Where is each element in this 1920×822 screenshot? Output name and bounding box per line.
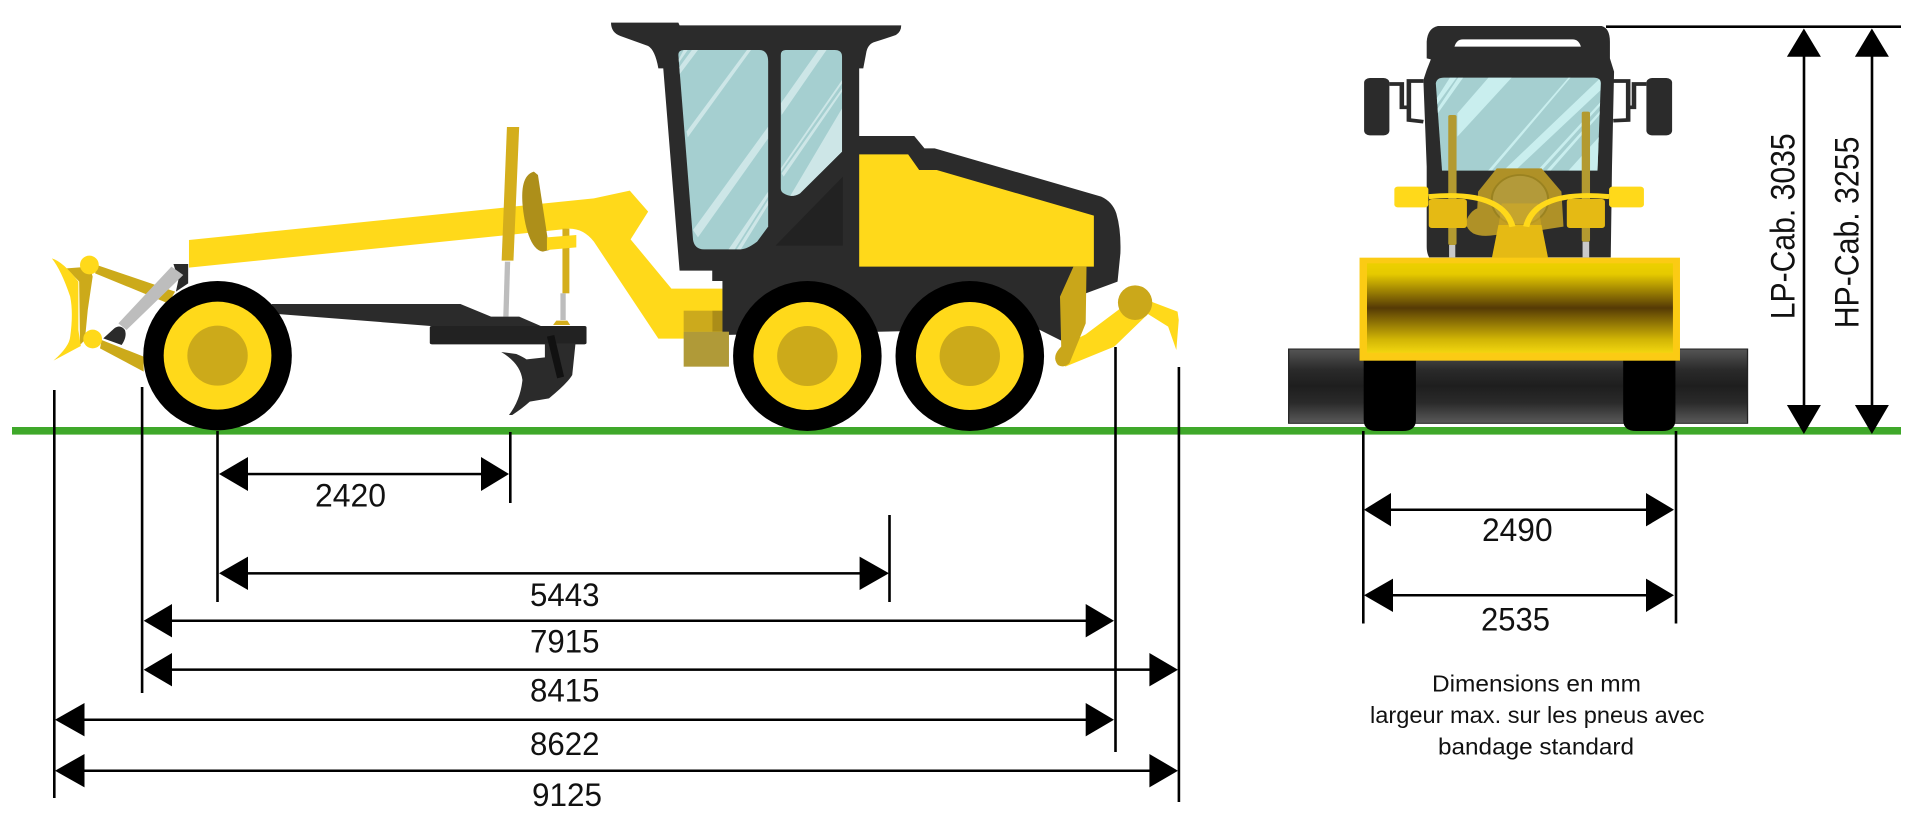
front push frame bbox=[52, 256, 188, 372]
arrow 5443 bbox=[219, 557, 889, 590]
drawbar and moldboard bbox=[271, 304, 587, 415]
cab and engine body bbox=[611, 23, 1121, 341]
rear wheel bbox=[896, 281, 1044, 431]
right mirror bbox=[1613, 78, 1672, 135]
note text: largeur max. sur les pneus avec bbox=[1370, 702, 1704, 728]
left mirror bbox=[1364, 78, 1423, 135]
top height reference line bbox=[1606, 25, 1901, 28]
arrow 2535 bbox=[1364, 579, 1674, 612]
arrow LP-Cab height bbox=[1787, 28, 1821, 434]
windshield bbox=[1436, 78, 1601, 171]
dimension lines front view bbox=[1362, 25, 1901, 623]
value 2490: 2490 bbox=[1482, 512, 1553, 548]
arrow HP-Cab height bbox=[1855, 28, 1889, 434]
label HP-Cab height: HP-Cab. 3255 bbox=[1829, 137, 1867, 328]
grader front view bbox=[1289, 26, 1748, 431]
ground line bbox=[12, 427, 1901, 435]
width extension lines bbox=[1362, 431, 1677, 624]
front wheel bbox=[143, 281, 292, 430]
cab front bbox=[1423, 26, 1614, 257]
arrow 2490 bbox=[1364, 493, 1674, 526]
middle wheel bbox=[733, 281, 882, 431]
value 9125: 9125 bbox=[532, 777, 602, 813]
grader side view bbox=[52, 23, 1179, 431]
right tyre bbox=[1623, 361, 1675, 431]
note text: Dimensions en mm bbox=[1432, 671, 1641, 697]
lift cylinders bbox=[502, 127, 576, 325]
value 2420: 2420 bbox=[315, 478, 386, 514]
value 7915: 7915 bbox=[530, 623, 600, 659]
engine hood bbox=[859, 154, 1094, 267]
dark door panel bbox=[776, 177, 843, 246]
dozer blade bbox=[1360, 258, 1680, 361]
arrow 7915 bbox=[144, 604, 1114, 637]
arrow 8622 bbox=[55, 703, 1114, 736]
left tyre bbox=[1364, 361, 1416, 431]
value 5443: 5443 bbox=[530, 577, 600, 613]
arrow 8415 bbox=[144, 653, 1178, 686]
counterweight blocks bbox=[684, 311, 722, 332]
label LP-Cab height: LP-Cab. 3035 bbox=[1764, 133, 1802, 319]
main frame beam bbox=[189, 191, 722, 339]
circle mount bbox=[1466, 168, 1563, 236]
right side arm bbox=[1609, 187, 1644, 207]
pedestal bbox=[1492, 203, 1548, 258]
lower rear block bbox=[684, 332, 729, 367]
rear ripper bbox=[1055, 267, 1179, 367]
value 8622: 8622 bbox=[530, 726, 600, 762]
arrow 2420 bbox=[219, 457, 509, 491]
rear axle bbox=[1289, 349, 1748, 423]
value 8415: 8415 bbox=[530, 673, 600, 709]
right lift box bbox=[1567, 199, 1605, 228]
value 2535: 2535 bbox=[1481, 602, 1550, 638]
door window bbox=[781, 50, 842, 197]
side window bbox=[678, 50, 768, 249]
note text bbox=[1370, 671, 1704, 759]
arrow 9125 bbox=[55, 754, 1178, 787]
dimension values side view bbox=[315, 478, 602, 813]
roof slot bbox=[1454, 39, 1581, 47]
dimension lines side view bbox=[53, 347, 1180, 802]
left side arm bbox=[1394, 187, 1428, 207]
left lift box bbox=[1429, 199, 1467, 228]
extension lines bbox=[53, 347, 1180, 802]
note text: bandage standard bbox=[1438, 733, 1634, 759]
yellow hoses bbox=[1429, 196, 1609, 227]
hydraulic rods bbox=[1448, 112, 1590, 257]
